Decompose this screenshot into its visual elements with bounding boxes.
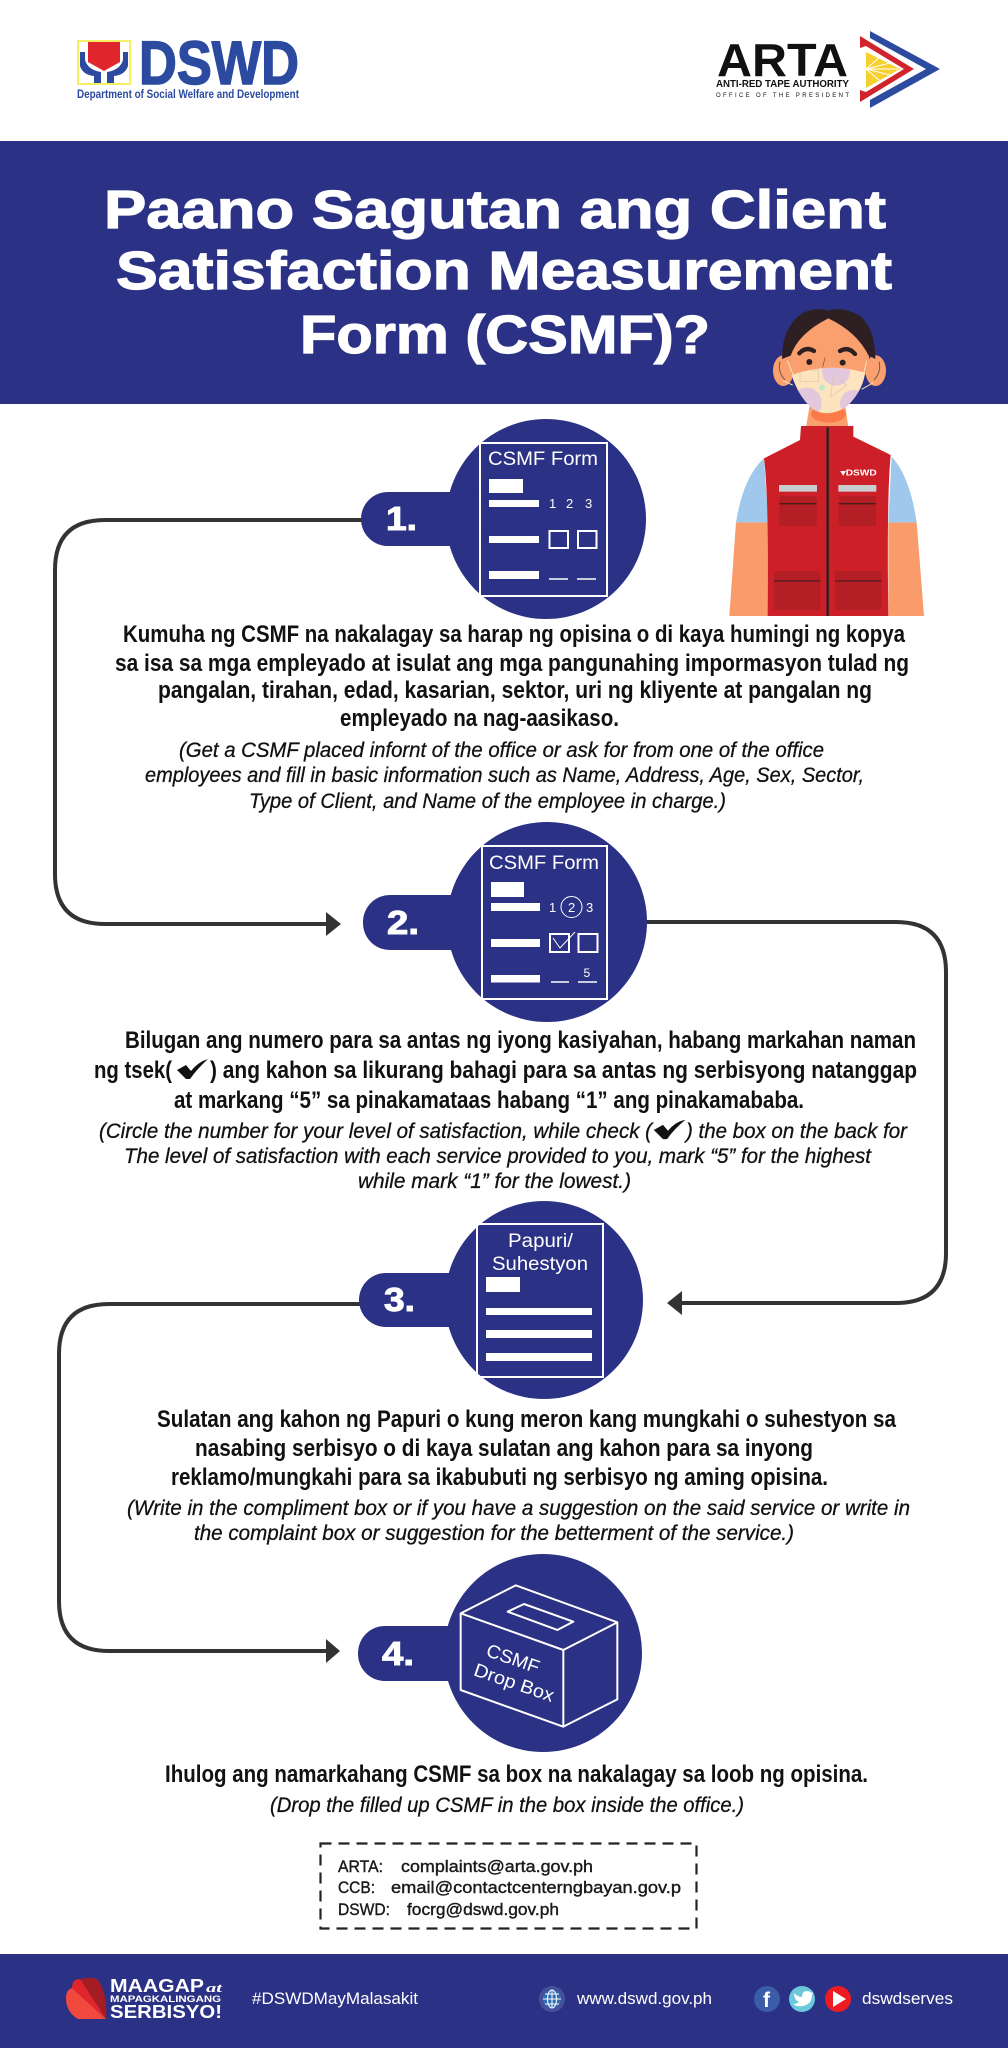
step 3 Tagalog text: nasabing serbisyo o di kaya sulatan ang kahon para sa inyong (195, 1435, 813, 1462)
step 2 English translation: while mark “1” for the lowest.) (358, 1169, 631, 1193)
title: Paano Sagutan ang Client (104, 180, 886, 240)
logo: DSWD: Department of Social Welfare and Development (77, 89, 299, 101)
eyes and brows (799, 349, 855, 367)
step 1 badge: CSMF Form (361, 419, 646, 619)
title: Form (CSMF)? (300, 305, 710, 365)
contact lines: CCB: (338, 1878, 375, 1897)
form icon (480, 443, 607, 596)
contact lines (338, 1857, 681, 1919)
step 1 English translation: (Get a CSMF placed infornt of the office or ask for from one of the office (179, 738, 824, 762)
step 3 English translation: (Write in the compliment box or if you have a suggestion on the said service or write in (127, 1496, 910, 1520)
contact lines: focrg@dswd.gov.ph (407, 1900, 559, 1919)
step 1 Tagalog text: empleyado na nag-aasikaso. (340, 705, 619, 732)
contact box (320, 1844, 696, 1928)
connector arrow: step 3 to step 4 (59, 1304, 362, 1663)
step 3 Tagalog text (157, 1406, 896, 1491)
step 4 badge: CSMF drop box (358, 1554, 642, 1752)
face (787, 318, 869, 403)
compliment form icon: Papuri/ (508, 1231, 574, 1252)
connector arrow: step 2 to step 3 (645, 922, 946, 1315)
campaign logo: Maagap at Mapagkalingang Serbisyo: MAPAGKALINGANG (110, 1994, 221, 2005)
arms and sleeves (729, 457, 924, 616)
step 3 English translation (127, 1496, 910, 1545)
campaign logo: Maagap at Mapagkalingang Serbisyo (66, 1976, 223, 2022)
form icon: 2 (566, 496, 573, 511)
zipper (824, 427, 831, 616)
marked form icon: 3 (586, 900, 593, 915)
logo: ARTA (716, 31, 940, 108)
marked form icon (482, 846, 607, 999)
hashtag: #DSWDMayMalasakit (252, 1989, 418, 2008)
step 1 English translation: employees and fill in basic information such as Name, Address, Age, Sex, Sector, (145, 763, 864, 787)
step 2 English translation: ) the box on the back for (683, 1119, 908, 1143)
form icon: CSMF Form (488, 449, 598, 470)
marked form icon: 1 (549, 900, 556, 915)
title: Satisfaction Measurement (116, 241, 892, 301)
website: www.dswd.gov.ph (576, 1989, 712, 2008)
step 3 Tagalog text: reklamo/mungkahi para sa ikabubuti ng serbisyo ng aming opisina. (171, 1464, 828, 1491)
step number: 1. (386, 500, 417, 537)
step number: 2. (387, 904, 419, 941)
step 2 badge: CSMF Form with marks (363, 822, 647, 1022)
step 4 Tagalog text: Ihulog ang namarkahang CSMF sa box na nakalagay sa loob ng opisina. (165, 1761, 868, 1788)
icon: facebook: f (763, 1989, 771, 2012)
form icon: 3 (585, 496, 592, 511)
logo: ARTA: OFFICE OF THE PRESIDENT (716, 93, 849, 99)
face mask (792, 368, 865, 414)
campaign logo: Maagap at Mapagkalingang Serbisyo: MAAGAP (110, 1976, 204, 1996)
marked form icon: 5 (584, 966, 590, 980)
icon: twitter (789, 1986, 815, 2012)
vest label: ▾DSWD (839, 467, 877, 477)
step 1 English translation (145, 738, 864, 813)
marked form icon: 2 (568, 900, 575, 915)
step 4 English translation: (Drop the filled up CSMF in the box inside the office.) (270, 1793, 744, 1817)
drop box icon: Drop Box (471, 1659, 558, 1706)
title band (0, 141, 1008, 404)
mask straps (783, 361, 873, 389)
logo: ARTA: ARTA (717, 34, 848, 86)
step number: 3. (384, 1281, 415, 1318)
campaign logo: Maagap at Mapagkalingang Serbisyo: at (206, 1980, 223, 1995)
step number: 4. (382, 1635, 414, 1672)
drop box icon: CSMF (484, 1640, 543, 1677)
icon: globe (539, 1986, 565, 2012)
form icon: 1 (549, 496, 556, 511)
step 3 badge: Papuri / Suhestyon (359, 1201, 643, 1399)
title (104, 180, 892, 365)
vest pockets (774, 485, 881, 610)
red vest (764, 426, 891, 616)
marked form icon: CSMF Form (489, 853, 599, 874)
step 2 Tagalog text: ng tsek( (94, 1057, 173, 1084)
compliment form icon (477, 1224, 603, 1377)
step 1 Tagalog text (115, 621, 909, 732)
step 2 English translation (99, 1119, 908, 1193)
contact lines: email@contactcenterngbayan.gov.p (391, 1878, 681, 1897)
contact lines: ARTA: (338, 1857, 383, 1876)
icon: check mark (177, 1059, 208, 1079)
logo: DSWD: DSWD (139, 29, 299, 97)
icon: youtube (825, 1986, 851, 2012)
contact lines: complaints@arta.gov.ph (401, 1857, 593, 1876)
contact lines: DSWD: (338, 1900, 390, 1919)
step 3 English translation: the complaint box or suggestion for the betterment of the service.) (194, 1521, 794, 1545)
campaign logo: Maagap at Mapagkalingang Serbisyo: SERBISYO! (110, 2002, 222, 2022)
logo: ARTA: ANTI-RED TAPE AUTHORITY (716, 79, 849, 90)
ears and neck (773, 355, 886, 427)
social handle: dswdserves (862, 1989, 953, 2008)
footer band (0, 1954, 1008, 2048)
connector arrow: step 1 to step 2 (55, 520, 362, 936)
step 1 English translation: Type of Client, and Name of the employee in charge.) (249, 789, 726, 813)
compliment form icon: Suhestyon (492, 1254, 588, 1275)
icon: check mark (654, 1120, 685, 1139)
logo: DSWD (77, 29, 299, 101)
hair (782, 309, 875, 359)
step 2 English translation: (Circle the number for your level of satisfaction, while check ( (99, 1119, 654, 1143)
icon: facebook (754, 1986, 780, 2012)
step 2 English translation: The level of satisfaction with each service provided to you, mark “5” for the highest (124, 1144, 872, 1168)
step 2 Tagalog text: at markang “5” sa pinakamataas habang “1” ang pinakamababa. (174, 1087, 804, 1114)
character: DSWD staff in red vest with face mask (729, 309, 924, 616)
drop box icon (461, 1585, 617, 1727)
step 2 Tagalog text (94, 1027, 917, 1114)
step 1 Tagalog text: pangalan, tirahan, edad, kasarian, sektor, uri ng kliyente at pangalan ng (158, 677, 872, 704)
